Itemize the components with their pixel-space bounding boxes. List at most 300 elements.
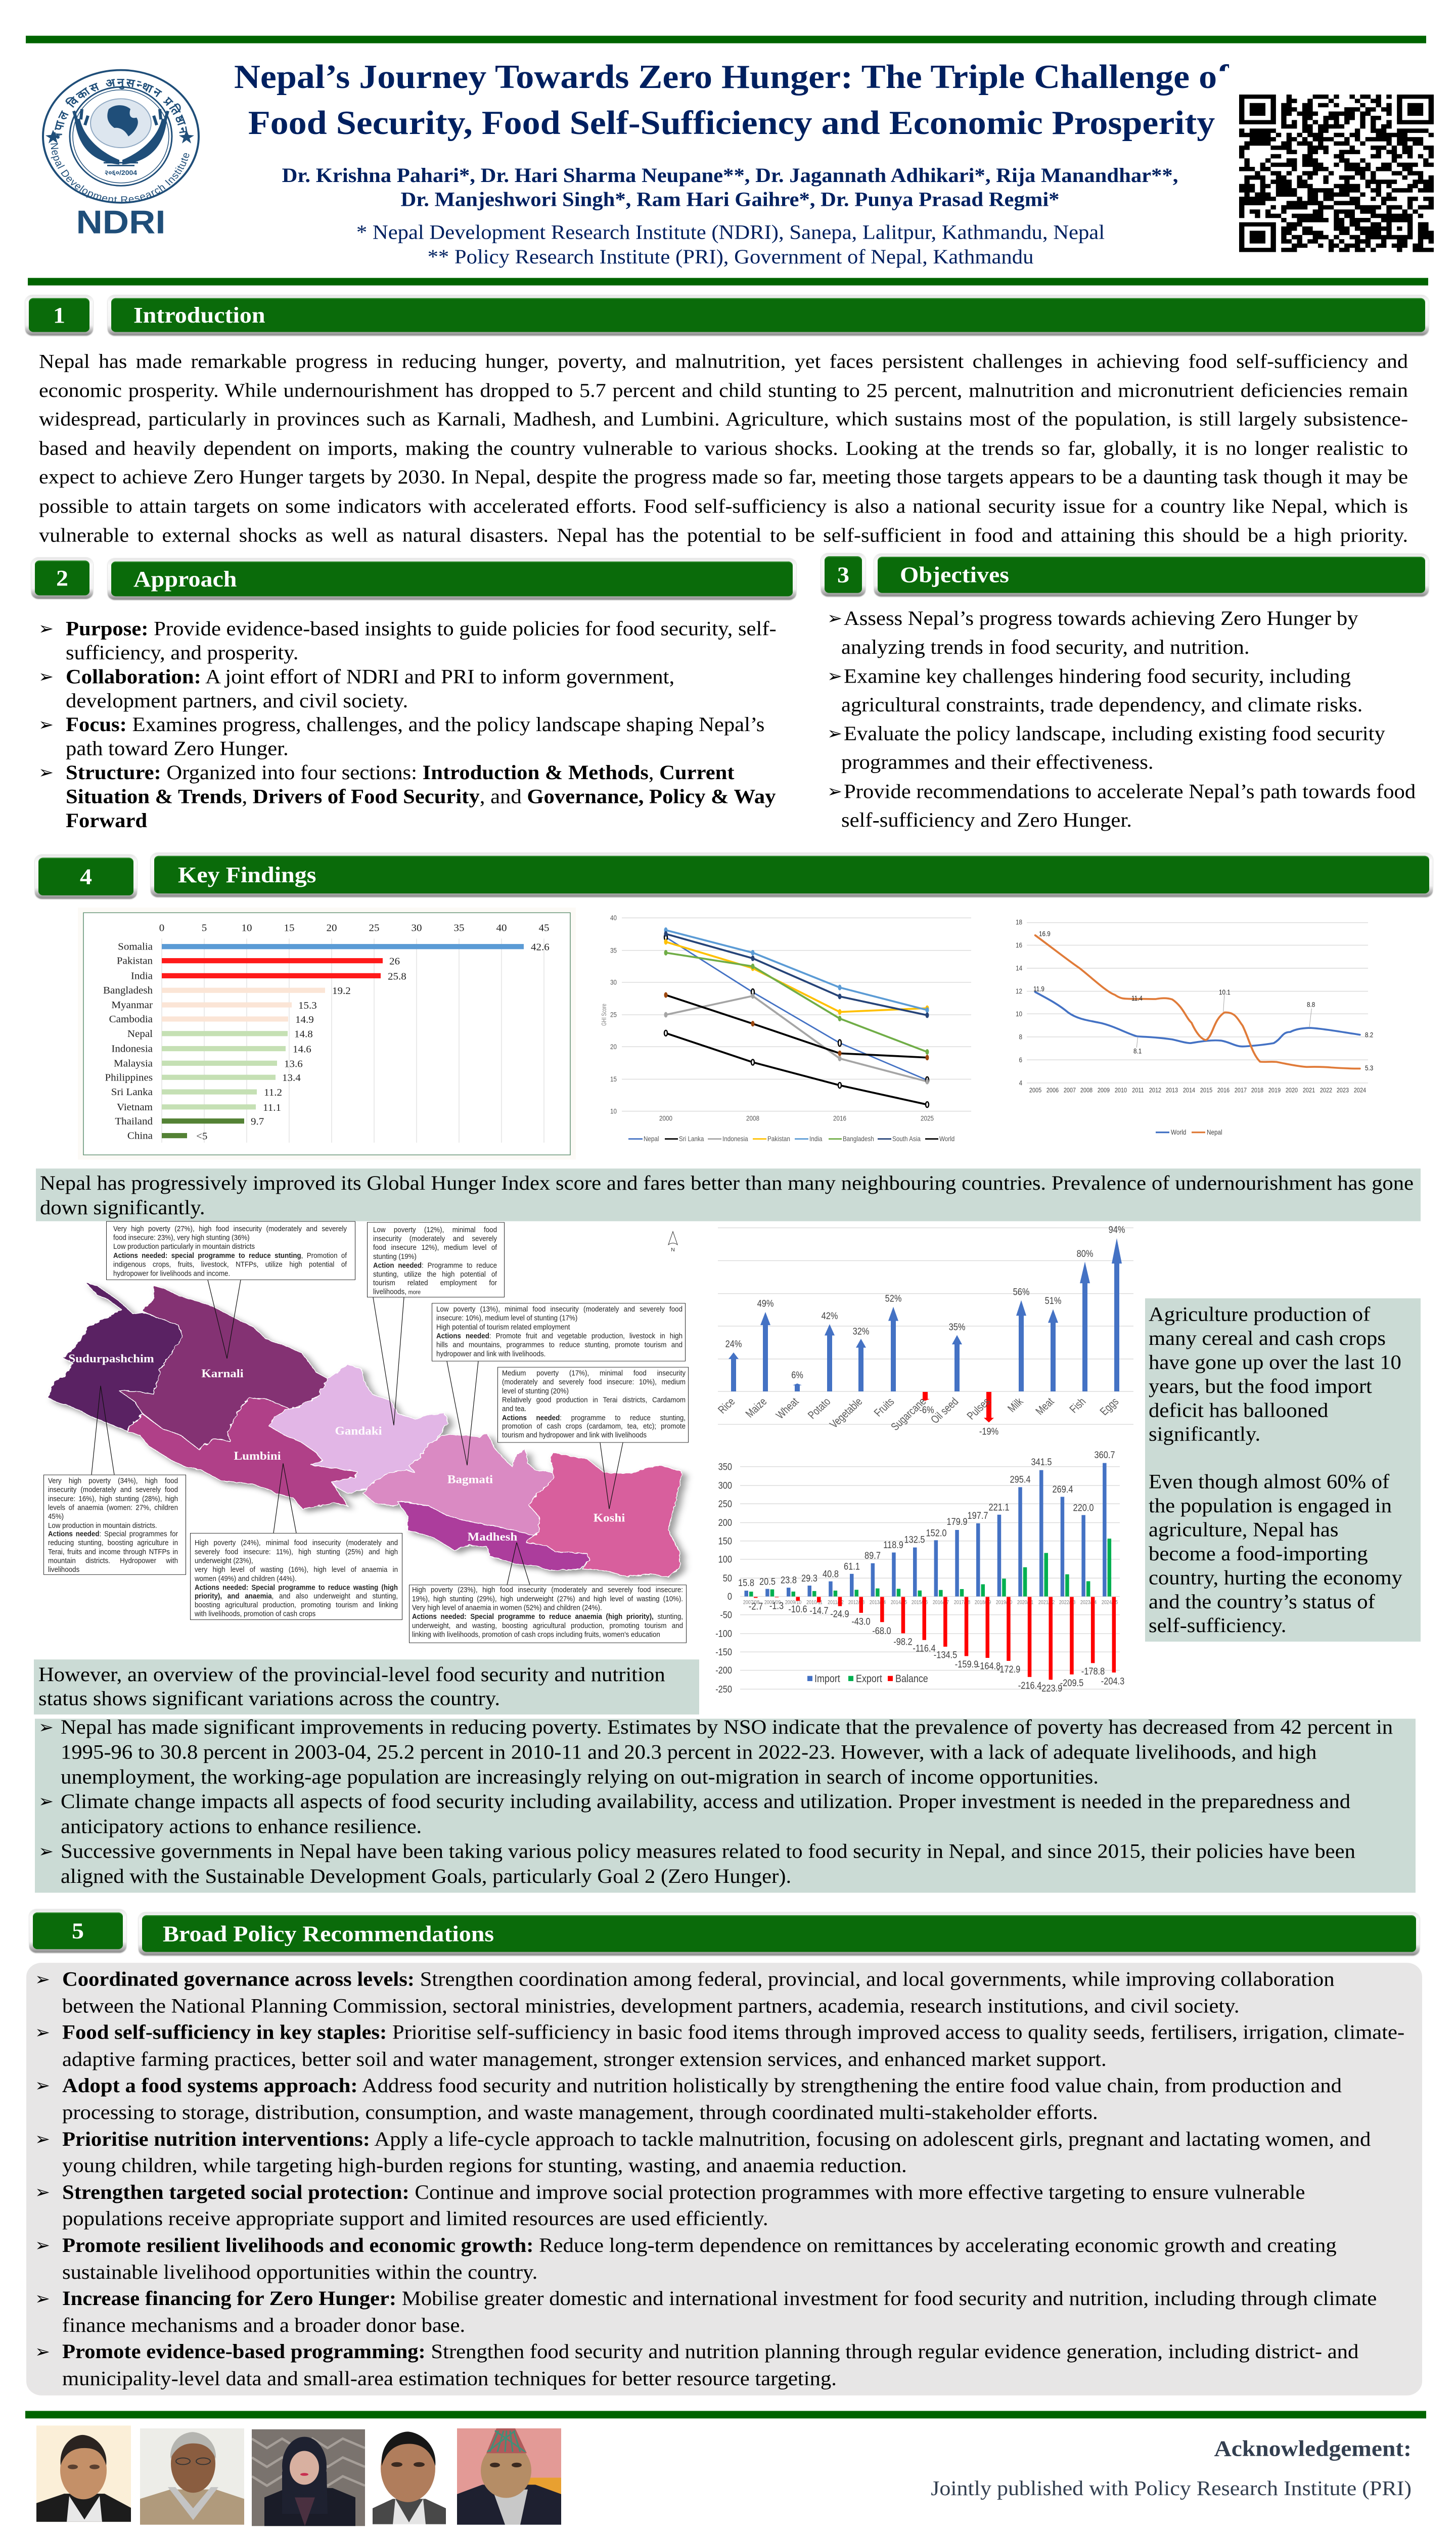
- line chart: prevalence of undernourishment, Nepal and World: 8.8: [1307, 1001, 1315, 1008]
- side panel: agriculture and imports: many cereal and cash crops: [1149, 1327, 1386, 1349]
- section 5 number: 5: [72, 1918, 84, 1943]
- arrow chart: production change by commodity: -19%: [979, 1426, 998, 1437]
- bar chart: Global Hunger Index by country: China: [127, 1130, 153, 1141]
- introduction text: possible to attain targets on some indicators with accelerated efforts. Food self-sufficiency is also a national security issue for a country like Nepal, which is: [39, 495, 1408, 517]
- findings bullets band: 1995-96 to 30.8 percent in 2003-04, 25.2 percent in 2010-11 and 20.3 percent in 2022-23. However, with a lack of adequate livelihoods, and high: [61, 1741, 1316, 1764]
- callout band: provincial variations: However, an overview of the provincial-level food security and nutrition: [38, 1664, 665, 1686]
- panel: policy recommendations: Increase financing for Zero Hunger: Mobilise greater domestic and international investment for food security and nutrition, including through climate: [62, 2288, 1377, 2310]
- panel: policy recommendations: ➢: [35, 2342, 50, 2362]
- bar chart: food import, export and balance: -100: [715, 1628, 732, 1639]
- section 5 heading: Broad Policy Recommendations: Broad Policy Recommendations: [163, 1921, 494, 1946]
- section 1 number: [25, 295, 93, 335]
- line chart: GHI score trends: Nepal: [644, 1135, 659, 1143]
- bar chart: food import, export and balance: -68.0: [872, 1625, 891, 1636]
- line chart: prevalence of undernourishment, Nepal and World: 2023: [1337, 1087, 1349, 1094]
- callout: Sudurpashchim: levels of anaemia (women: 27%, children: [48, 1504, 178, 1512]
- callout: Sudurpashchim: Very high poverty (34%), high food: [48, 1477, 178, 1485]
- callout: Sudurpashchim: insecurity (moderately and severely food: [48, 1486, 178, 1494]
- bottom green rule: [25, 2411, 1426, 2418]
- side panel: agriculture and imports: [1145, 1298, 1421, 1642]
- map: provinces of Nepal with pointers: Madhesh: [468, 1530, 517, 1543]
- bar chart: Global Hunger Index by country: Somalia: [118, 941, 153, 952]
- bar chart: food import, export and balance: 2024/25: [1102, 1600, 1118, 1606]
- bar chart: food import, export and balance: 20.5: [759, 1576, 776, 1587]
- bar chart: food import, export and balance: 220.0: [1073, 1502, 1094, 1513]
- logo: NDRI emblem: नेपाल विकास अनुसन्धान प्रतिष्ठान: [51, 79, 187, 139]
- bar chart: food import, export and balance: -14.7: [809, 1605, 829, 1616]
- bar chart: Global Hunger Index by country: 11.1: [263, 1102, 281, 1113]
- bar chart: food import, export and balance: 0: [727, 1591, 732, 1602]
- bar chart: Global Hunger Index by country: 25: [369, 922, 379, 933]
- line chart: prevalence of undernourishment, Nepal and World: 16: [1016, 941, 1022, 949]
- section 2 number: [31, 557, 93, 599]
- callout: Sudurpashchim: Actions needed: Special programmes for: [48, 1530, 178, 1539]
- panel: policy recommendations: Adopt a food systems approach: Address food security and nutrition holistically by strengthening the entire food value chain, from production and: [62, 2075, 1342, 2097]
- panel: policy recommendations: ➢: [35, 2236, 50, 2255]
- introduction text: widespread, particularly in provinces such as Karnali, Madhesh, and Lumbini. Agriculture, which sustains most of the population, is still largely subsistence-: [39, 408, 1408, 430]
- panel: policy recommendations: ➢: [35, 2023, 50, 2042]
- side panel: agriculture and imports: and the country’s status of: [1149, 1591, 1375, 1613]
- callout: Sudurpashchim: 45%): [48, 1513, 64, 1520]
- map: provinces of Nepal with pointers: Bagmati: [447, 1473, 493, 1486]
- panel: policy recommendations: Strengthen targeted social protection: Continue and improve social protection programmes with more effective targeting to ensure vulnerable: [62, 2181, 1305, 2203]
- callout: Koshi: (moderately and severely food insecure: 10%), medium: [502, 1378, 686, 1386]
- line chart: prevalence of undernourishment, Nepal and World: 6: [1019, 1056, 1022, 1064]
- line chart: GHI score trends: 40: [610, 914, 617, 922]
- bar chart: food import, export and balance: 2019/20: [996, 1600, 1012, 1606]
- section 4 number: [35, 854, 137, 898]
- section 3 heading: Objectives: [874, 554, 1429, 596]
- province: Sudurpashchim: [48, 1283, 183, 1430]
- side panel: agriculture and imports: significantly.: [1149, 1423, 1260, 1446]
- bar chart: food import, export and balance: 269.4: [1053, 1483, 1073, 1495]
- bar chart: Global Hunger Index by country: India: [131, 970, 153, 981]
- callout: Karnali: [106, 1221, 355, 1280]
- callout: Karnali: food insecure: 23%), very high stunting (36%): [113, 1234, 250, 1242]
- section 2 heading: Approach: [108, 558, 796, 600]
- line chart: prevalence of undernourishment, Nepal and World: 2024: [1354, 1087, 1366, 1094]
- callout: Lumbini: severely food insecure: 11%), high stunting (25%) and high: [195, 1548, 398, 1556]
- callout: Bagmati: High potential of tourism related employment: [436, 1323, 570, 1331]
- arrow chart: production change by commodity: 32%: [853, 1326, 870, 1337]
- bar chart: Global Hunger Index by country: Cambodia: [109, 1013, 153, 1025]
- bar chart: food import, export and balance: 132.5: [904, 1534, 925, 1545]
- section 1 number: 1: [53, 302, 65, 328]
- callout: Bagmati: Actions needed: Promote fruit and vegetable production, livestock in high: [436, 1332, 682, 1340]
- bar chart: Global Hunger Index by country: Bangladesh: [103, 985, 153, 996]
- line chart: GHI score trends: South Asia: [892, 1135, 921, 1143]
- authors: Dr. Manjeshwori Singh*, Ram Hari Gaihre*, Dr. Punya Prasad Regmi*: [400, 188, 1060, 210]
- callout: Gandaki: stunting (19%): [373, 1252, 417, 1260]
- line chart: GHI score trends: 20: [610, 1043, 617, 1051]
- callout: Bagmati: insecure: 10%), medium level of stunting (17%): [436, 1314, 577, 1322]
- arrow chart: production change by commodity: 24%: [725, 1338, 742, 1349]
- affiliations: ** Policy Research Institute (PRI), Government of Nepal, Kathmandu: [428, 246, 1033, 268]
- callout: Lumbini: boosting agricultural production, promoting tourism and linking: [195, 1601, 398, 1609]
- arrow chart: production change by commodity: Meat: [1033, 1395, 1057, 1417]
- objectives bullets: ➢: [827, 609, 842, 628]
- bar chart: Global Hunger Index by country: 26: [389, 956, 400, 967]
- side panel: agriculture and imports: the population is engaged in: [1149, 1495, 1392, 1517]
- bar chart: food import, export and balance: Export: [856, 1673, 882, 1685]
- arrow chart: production change by commodity: 35%: [949, 1322, 966, 1332]
- bar chart: food import, export and balance: -178.8: [1081, 1665, 1105, 1677]
- bar chart: food import, export and balance: 40.8: [823, 1568, 839, 1579]
- callout band: provincial variations: [34, 1659, 699, 1714]
- bar chart: Global Hunger Index by country: Pakistan: [117, 955, 153, 966]
- bar chart: food import, export and balance: 300: [718, 1480, 732, 1491]
- bar chart: Global Hunger Index by country: Nepal: [127, 1028, 153, 1039]
- line chart: prevalence of undernourishment, Nepal and World: 14: [1016, 964, 1023, 972]
- callout: Koshi: Medium poverty (17%), minimal food insecurity: [502, 1369, 686, 1377]
- arrow chart: production change by commodity: Potato: [805, 1395, 833, 1421]
- bar chart: food import, export and balance: 50: [723, 1572, 732, 1584]
- title: Food Security, Food Self-Sufficiency and Economic Prosperity: [248, 104, 1215, 142]
- approach bullets: ➢: [38, 619, 54, 639]
- bar chart: food import, export and balance: 2008/09: [764, 1600, 781, 1606]
- section 4 number: 4: [80, 864, 92, 889]
- findings bullets band: Successive governments in Nepal have been taking various policy measures related to food security in Nepal, and since 2015, their policies have been: [61, 1840, 1355, 1863]
- bar chart: food import, export and balance: -223.9: [1039, 1683, 1062, 1694]
- panel: policy recommendations: between the National Planning Commission, sectoral ministries, development partners, academia, research institutions, and civil society.: [62, 1995, 1240, 2017]
- bar chart: food import, export and balance: -116.4: [913, 1643, 936, 1654]
- callout: Koshi: [497, 1367, 689, 1442]
- province: Bagmati: [363, 1433, 553, 1536]
- section 1 heading: Introduction: Introduction: [133, 302, 265, 328]
- line chart: prevalence of undernourishment, Nepal and World: 2008: [1080, 1087, 1093, 1094]
- arrow chart: production change by commodity: 6%: [791, 1369, 803, 1380]
- line chart: prevalence of undernourishment, Nepal and World: 11.9: [1033, 985, 1044, 993]
- objectives bullets: Assess Nepal’s progress towards achieving Zero Hunger by: [844, 608, 1358, 629]
- objectives bullets: agricultural constraints, trade dependency, and climate risks.: [841, 694, 1362, 716]
- bar chart: food import, export and balance: -172.9: [997, 1664, 1020, 1675]
- section 3 number: [821, 553, 866, 596]
- bar chart: Global Hunger Index by country: 15: [284, 922, 294, 933]
- side panel: agriculture and imports: self-sufficiency.: [1149, 1615, 1286, 1637]
- line chart: GHI score trends: Pakistan: [767, 1135, 790, 1143]
- callout: Bagmati: hills and mountains, programmes to reduce stunting, promote tourism and: [436, 1341, 682, 1349]
- arrow chart: production change by commodity: Fruits: [872, 1395, 897, 1419]
- map: provinces of Nepal with pointers: Koshi: [594, 1512, 625, 1524]
- arrow chart: production change by commodity: Vegetable: [827, 1395, 865, 1431]
- line chart: prevalence of undernourishment, Nepal and World: 2005: [1029, 1087, 1041, 1094]
- line chart: GHI score trends: 2025: [921, 1114, 934, 1122]
- objectives bullets: ➢: [827, 666, 842, 686]
- title: Nepal’s Journey Towards Zero Hunger: The Triple Challenge o: [234, 58, 1217, 96]
- side panel: agriculture and imports: deficit has ballooned: [1149, 1400, 1328, 1421]
- bar chart: food import, export and balance: -2.7: [749, 1601, 763, 1612]
- findings bullets band: ➢: [38, 1842, 54, 1861]
- bar chart: food import, export and balance: 89.7: [864, 1550, 881, 1561]
- photo: author 4: [373, 2430, 446, 2524]
- line chart: prevalence of undernourishment, Nepal and World: World: [1171, 1128, 1186, 1136]
- panel: policy recommendations: processing to storage, distribution, consumption, and waste management, through coordinated multi-stakeholder efforts.: [62, 2101, 1098, 2124]
- approach bullets: [38, 618, 777, 832]
- callout: Madhesh: underweight, and wasting, boosting agricultural production, promoting tourism and: [412, 1621, 683, 1630]
- approach bullets: Purpose: Provide evidence-based insights to guide policies for food security, self-: [66, 618, 777, 640]
- arrow chart: production change by commodity: Milk: [1005, 1395, 1026, 1415]
- line chart: prevalence of undernourishment, Nepal and World: 2006: [1046, 1087, 1059, 1094]
- callout: Gandaki: [367, 1222, 505, 1297]
- arrow chart: production change by commodity: Pulses: [965, 1395, 993, 1422]
- bar chart: food import, export and balance: 2015/16: [912, 1600, 928, 1606]
- line chart: prevalence of undernourishment, Nepal and World: 8.1: [1133, 1047, 1142, 1055]
- findings bullets band: ➢: [38, 1792, 54, 1812]
- callout: Karnali: Very high poverty (27%), high food insecurity (moderately and severely: [113, 1225, 347, 1233]
- arrow chart: production change by commodity: 94%: [1109, 1224, 1125, 1235]
- bar chart: food import, export and balance: [713, 1446, 1132, 1698]
- objectives bullets: self-sufficiency and Zero Hunger.: [841, 809, 1132, 831]
- callout: Sudurpashchim: Low production in mountain districts.: [48, 1521, 157, 1529]
- bar chart: Global Hunger Index by country: 5: [202, 922, 207, 933]
- callout: Koshi: tourism and hydropower and link with livelihoods: [502, 1431, 647, 1439]
- callout: Karnali: Actions needed: special programme to reduce stunting, Promotion of: [113, 1252, 347, 1259]
- arrow chart: production change by commodity: Eggs: [1098, 1395, 1121, 1418]
- side panel: agriculture and imports: become a food-importing: [1149, 1543, 1368, 1565]
- callout: Gandaki: stunting, utilize the high potential of: [373, 1271, 497, 1278]
- bar chart: food import, export and balance: -10.6: [788, 1604, 807, 1614]
- line chart: prevalence of undernourishment, Nepal and World: 10.1: [1219, 988, 1231, 996]
- callout: Sudurpashchim: Terai, fruits and income through NTFPs in: [48, 1548, 178, 1556]
- bar chart: Global Hunger Index by country: 0: [159, 922, 164, 933]
- panel: policy recommendations: Coordinated governance across levels: Strengthen coordination among federal, provincial, and local governments, while improving collaboration: [62, 1968, 1335, 1991]
- callout: Koshi: Actions needed: programme to reduce stunting,: [502, 1414, 686, 1422]
- bar chart: food import, export and balance: 152.0: [926, 1527, 946, 1539]
- bar chart: Global Hunger Index by country: 14.8: [294, 1028, 313, 1040]
- bar chart: Global Hunger Index by country: Sri Lanka: [111, 1086, 153, 1098]
- section 2 heading: Approach: Approach: [133, 566, 237, 592]
- bar chart: food import, export and balance: -43.0: [851, 1616, 871, 1627]
- province: Koshi: [526, 1453, 681, 1577]
- line chart: GHI score trends: 35: [610, 946, 617, 954]
- bar chart: Global Hunger Index by country: 13.6: [284, 1058, 303, 1069]
- section 1 heading: Introduction: [108, 295, 1429, 335]
- bar chart: food import, export and balance: -200: [715, 1664, 732, 1676]
- line chart: GHI score trends: 30: [610, 978, 617, 986]
- callout band: Global Hunger Index summary: down significantly.: [40, 1197, 205, 1218]
- section 4 heading: Key Findings: [151, 852, 1433, 897]
- line chart: prevalence of undernourishment, Nepal and World: [1016, 918, 1373, 1136]
- panel: policy recommendations: ➢: [35, 2130, 50, 2149]
- callout: Sudurpashchim: insecure: 16%), high stunting (28%), high: [48, 1495, 178, 1503]
- bar chart: food import, export and balance: Import: [814, 1673, 840, 1685]
- line chart: prevalence of undernourishment, Nepal and World: 16.9: [1039, 930, 1051, 938]
- bar chart: food import, export and balance: 29.3: [801, 1572, 817, 1584]
- objectives bullets: Examine key challenges hindering food security, including: [844, 665, 1351, 687]
- bar chart: Global Hunger Index by country: 9.7: [251, 1116, 264, 1127]
- approach bullets: Structure: Organized into four sections: Introduction & Methods, Current: [66, 762, 735, 784]
- bar chart: food import, export and balance: 2018/19: [975, 1600, 991, 1606]
- authors: Dr. Krishna Pahari*, Dr. Hari Sharma Neupane**, Dr. Jagannath Adhikari*, Rija Manandhar**,: [282, 164, 1178, 187]
- line chart: prevalence of undernourishment, Nepal and World: 2017: [1235, 1087, 1247, 1094]
- photo: author 2: [140, 2428, 244, 2524]
- approach bullets: ➢: [38, 715, 54, 735]
- bar chart: food import, export and balance: -159.9: [955, 1658, 978, 1669]
- bar chart: food import, export and balance: 221.1: [989, 1502, 1009, 1512]
- callout: Koshi: and tea.: [502, 1405, 526, 1413]
- bar chart: food import, export and balance: -216.4: [1018, 1680, 1041, 1691]
- introduction text: [39, 350, 1408, 546]
- bar chart: Global Hunger Index by country: 42.6: [531, 941, 550, 953]
- callout: Gandaki: Action needed: Programme to reduce: [373, 1261, 497, 1270]
- map: provinces of Nepal with pointers: Gandaki: [335, 1425, 382, 1437]
- line chart: prevalence of undernourishment, Nepal and World: 12: [1016, 987, 1022, 995]
- bar chart: food import, export and balance: -1.3: [769, 1600, 784, 1611]
- panel: policy recommendations: [26, 1963, 1422, 2396]
- bar chart: food import, export and balance: 250: [718, 1498, 732, 1509]
- bar chart: food import, export and balance: -250: [715, 1684, 732, 1694]
- bar chart: Global Hunger Index by country: 45: [539, 922, 549, 933]
- arrow chart: production change by commodity: 51%: [1045, 1295, 1062, 1306]
- bar chart: Global Hunger Index by country: 19.2: [332, 985, 351, 997]
- affiliations: [356, 221, 1105, 268]
- callout: Lumbini: underweight (23%),: [195, 1557, 253, 1565]
- callout: Gandaki: Low poverty (12%), minimal food: [373, 1226, 497, 1234]
- panel: policy recommendations: ➢: [35, 2289, 50, 2309]
- province: Lumbini: [126, 1398, 356, 1509]
- panel: policy recommendations: Food self-sufficiency in key staples: Prioritise self-sufficiency in basic food items through improved access to quality seeds, fertilisers, irrigation, climate-: [62, 2022, 1404, 2044]
- callout: Gandaki: food insecure 12%), medium level of: [373, 1244, 497, 1252]
- line chart: prevalence of undernourishment, Nepal and World: 2014: [1183, 1087, 1195, 1094]
- bar chart: food import, export and balance: -204.3: [1101, 1676, 1124, 1687]
- bar chart: food import, export and balance: -164.8: [977, 1660, 1000, 1672]
- bar chart: food import, export and balance: Balance: [895, 1673, 928, 1685]
- objectives bullets: programmes and their effectiveness.: [841, 752, 1154, 774]
- callout: Lumbini: priority), and anaemia, and also underweight and stunting,: [195, 1593, 398, 1600]
- arrow chart: production change by commodity: -6%: [919, 1404, 934, 1415]
- line chart: GHI score trends: Sri Lanka: [679, 1135, 704, 1143]
- bar chart: food import, export and balance: 2013/14: [870, 1600, 886, 1606]
- bar chart: food import, export and balance: 179.9: [947, 1516, 967, 1527]
- bar chart: food import, export and balance: 295.4: [1010, 1474, 1030, 1485]
- findings bullets band: unemployment, the working-age population are increasingly relying on out-migration in search of income opportunities.: [61, 1766, 1099, 1788]
- introduction text: expect to achieve Zero Hunger targets by 2030. In Nepal, despite the progress made so far, meeting those targets appears to be a daunting task though it may be: [39, 466, 1408, 488]
- objectives bullets: Evaluate the policy landscape, including existing food security: [844, 723, 1385, 745]
- callout: Karnali: hydropower for livelihoods and income.: [113, 1270, 230, 1278]
- findings bullets band: ➢: [38, 1718, 54, 1737]
- bar chart: Global Hunger Index by country: Philippines: [105, 1072, 153, 1083]
- line chart: prevalence of undernourishment, Nepal and World: 2018: [1251, 1087, 1263, 1094]
- bar chart: food import, export and balance: 118.9: [883, 1539, 903, 1550]
- line chart: prevalence of undernourishment, Nepal and World: 5.3: [1365, 1064, 1373, 1072]
- bar chart: food import, export and balance: -24.9: [830, 1608, 849, 1619]
- findings bullets band: Climate change impacts all aspects of food security including availability, access and utilization. Proper investment is needed in the preparedness and: [61, 1791, 1350, 1813]
- bar chart: food import, export and balance: 2014/15: [891, 1600, 907, 1606]
- section 3 heading: Objectives: Objectives: [900, 562, 1009, 588]
- title: [234, 58, 1230, 142]
- panel: policy recommendations: finance mechanisms and a broader donor base.: [62, 2314, 465, 2336]
- objectives bullets: ➢: [827, 724, 842, 744]
- province: Gandaki: [268, 1364, 447, 1494]
- side panel: agriculture and imports: years, but the food import: [1149, 1375, 1372, 1397]
- callout band: Global Hunger Index summary: [36, 1168, 1421, 1221]
- bar chart: Global Hunger Index by country: 15.3: [298, 1000, 317, 1011]
- logo: NDRI emblem: २०६०/2004: [105, 169, 137, 176]
- map: provinces of Nepal with pointers: [48, 1280, 691, 1585]
- line chart: GHI score trends: 15: [610, 1075, 617, 1083]
- arrow chart: production change by commodity: Oil seed: [928, 1395, 961, 1426]
- line chart: prevalence of undernourishment, Nepal and World: 2011: [1132, 1087, 1144, 1094]
- panel: policy recommendations: young children, while targeting high-burden regions for stunting, wasting, and anaemia reduction.: [62, 2155, 907, 2177]
- logo: NDRI emblem: [42, 69, 200, 238]
- section 5 heading: Broad Policy Recommendations: [139, 1912, 1420, 1955]
- province: Madhesh: [397, 1501, 589, 1570]
- findings bullets band: Nepal has made significant improvements in reducing poverty. Estimates by NSO indicate that the prevalence of poverty has decreased from 42 percent in: [61, 1717, 1393, 1738]
- bar chart: Global Hunger Index by country: 14.9: [295, 1014, 314, 1025]
- line chart: prevalence of undernourishment, Nepal and World: 10: [1016, 1010, 1022, 1018]
- callout: Madhesh: Actions needed: Special programme to reduce anaemia (high priority), stunting,: [412, 1613, 683, 1621]
- bar chart: food import, export and balance: 150: [718, 1536, 732, 1546]
- line chart: prevalence of undernourishment, Nepal and World: 8: [1019, 1033, 1022, 1041]
- bar chart: Global Hunger Index by country: 30: [412, 922, 422, 933]
- callout: Sudurpashchim: mountain districts. Hydropower with: [48, 1557, 178, 1565]
- section 2 number: 2: [56, 565, 68, 591]
- photo: author 1: [36, 2425, 131, 2522]
- callout: Madhesh: 19%), high stunting (29%), high underweight (27%) and high level of wasting (10%).: [412, 1595, 683, 1603]
- panel: policy recommendations: Prioritise nutrition interventions: Apply a life-cycle approach to tackle malnutrition, focusing on adolescent girls, pregnant and lactating women, and: [62, 2128, 1371, 2150]
- bar chart: Global Hunger Index by country: 20: [327, 922, 337, 933]
- bar chart: Global Hunger Index by country: 10: [242, 922, 252, 933]
- approach bullets: sufficiency, and prosperity.: [66, 642, 298, 664]
- objectives bullets: ➢: [827, 782, 842, 801]
- arrow chart: production change by commodity: Sugarcane: [888, 1395, 929, 1433]
- approach bullets: path toward Zero Hunger.: [66, 738, 289, 760]
- arrow chart: production change by commodity: 80%: [1077, 1248, 1094, 1259]
- bar chart: food import, export and balance: 2012/13: [848, 1600, 864, 1606]
- introduction text: based and heavily dependent on imports, making the country vulnerable to various shocks. Looking at the trends so far, globally, it is no longer realistic to: [39, 437, 1408, 459]
- callout band: Global Hunger Index summary: Nepal has progressively improved its Global Hunger Index score and fares better than many neighbouring countries. Prevalence of undernourishment has gone: [40, 1172, 1414, 1194]
- arrow chart: production change by commodity: Maize: [743, 1395, 769, 1420]
- bar chart: food import, export and balance: 2023/24: [1080, 1600, 1097, 1606]
- bar chart: Global Hunger Index by country: 40: [496, 922, 507, 933]
- line chart: prevalence of undernourishment, Nepal and World: 2009: [1098, 1087, 1110, 1094]
- bar chart: Global Hunger Index by country: <5: [196, 1131, 207, 1142]
- callout: Koshi: level of stunting (20%): [502, 1387, 569, 1395]
- findings bullets band: [35, 1719, 1416, 1892]
- callout: Lumbini: High poverty (24%), minimal food insecurity (moderately and: [195, 1539, 398, 1547]
- callout: Lumbini: Actions needed: Special programme to reduce wasting (high: [195, 1584, 398, 1592]
- panel: policy recommendations: municipality-level data and small-area estimation techniques for better resource targeting.: [62, 2368, 837, 2389]
- bar chart: Global Hunger Index by country: Vietnam: [117, 1101, 153, 1113]
- line chart: prevalence of undernourishment, Nepal and World: 2021: [1303, 1087, 1315, 1094]
- introduction text: Nepal has made remarkable progress in reducing hunger, poverty, and malnutrition, yet faces persistent challenges in achieving food self-sufficiency and: [39, 350, 1408, 373]
- photo: author 5: [457, 2428, 561, 2524]
- acknowledgement text: Jointly published with Policy Research Institute (PRI): [931, 2477, 1412, 2500]
- side panel: agriculture and imports: Even though almost 60% of: [1149, 1471, 1389, 1493]
- callout: Madhesh: linking with livelihoods, promotion of cash crops including fruits, women's education: [412, 1631, 660, 1639]
- callout: Sudurpashchim: livelihoods: [48, 1566, 79, 1574]
- bar chart: food import, export and balance: 350: [718, 1461, 732, 1472]
- line chart: GHI score trends: GHI Score: [601, 1004, 608, 1026]
- bar chart: food import, export and balance: 2020/21: [1017, 1600, 1033, 1606]
- affiliations: * Nepal Development Research Institute (NDRI), Sanepa, Lalitpur, Kathmandu, Nepal: [356, 221, 1105, 244]
- approach bullets: Situation & Trends, Drivers of Food Security, and Governance, Policy & Way: [66, 786, 776, 808]
- panel: policy recommendations: ➢: [35, 2076, 50, 2096]
- approach bullets: Focus: Examines progress, challenges, and the policy landscape shaping Nepal’s: [66, 714, 764, 736]
- findings bullets band: anticipatory actions to enhance resilience.: [61, 1816, 422, 1838]
- bar chart: food import, export and balance: 23.8: [781, 1574, 797, 1586]
- bar chart: food import, export and balance: -209.5: [1060, 1678, 1083, 1688]
- side panel: agriculture and imports: Agriculture production of: [1149, 1303, 1370, 1326]
- callout: Madhesh: High poverty (23%), high food insecurity (moderately and severely food insecure:: [412, 1586, 683, 1594]
- bar chart: food import, export and balance: -98.2: [893, 1636, 913, 1647]
- line chart: prevalence of undernourishment, Nepal and World: 2012: [1149, 1087, 1161, 1094]
- line chart: prevalence of undernourishment, Nepal and World: 2015: [1200, 1087, 1212, 1094]
- icon: north arrow: N: [671, 1247, 675, 1253]
- callout: Sudurpashchim: reducing stunting, boosting agriculture in: [48, 1539, 178, 1547]
- approach bullets: Collaboration: A joint effort of NDRI and PRI to inform government,: [66, 666, 674, 688]
- findings bullets band: aligned with the Sustainable Development Goals, particularly Goal 2 (Zero Hunger).: [61, 1865, 791, 1887]
